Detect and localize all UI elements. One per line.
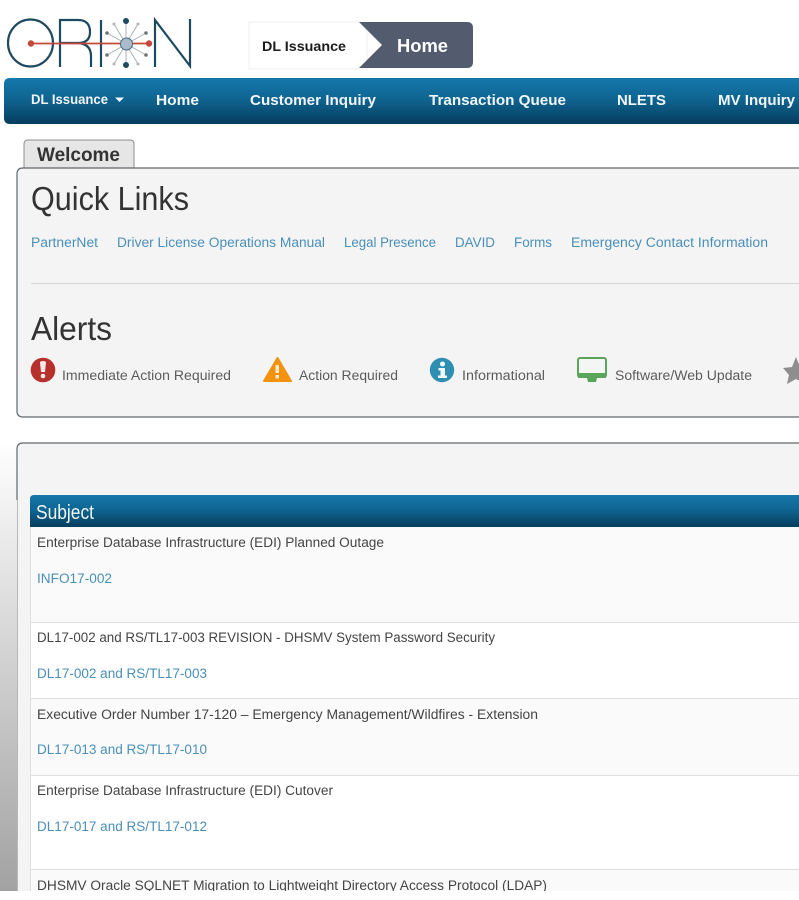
row 3: DL17-013 and RS/TL17-010 — [37, 742, 207, 757]
breadcrumb — [249, 22, 473, 69]
row 4: DL17-017 and RS/TL17-012 — [37, 819, 207, 834]
quick link list: PartnerNet — [31, 235, 98, 250]
icon: action required — [264, 358, 291, 381]
tab: Welcome — [24, 140, 134, 168]
navigation bar: Customer Inquiry — [250, 92, 377, 109]
row 4 — [37, 783, 334, 834]
table header: Subject — [30, 495, 799, 527]
navigation bar: DL Issuance — [31, 91, 108, 107]
tab: Welcome: Welcome — [37, 145, 120, 166]
row 2: DL17-002 and RS/TL17-003 — [37, 666, 207, 681]
row 3 — [37, 707, 538, 757]
panel: quick links and alerts — [17, 168, 799, 417]
table rows background — [30, 527, 799, 891]
quick link list: DAVID — [455, 235, 495, 250]
row 1: Enterprise Database Infrastructure (EDI) Planned Outage — [37, 535, 384, 550]
icon: immediate action — [31, 358, 55, 382]
icon: software update — [578, 358, 606, 382]
alert legend: Action Required — [299, 368, 398, 383]
row 1 — [37, 535, 384, 586]
table header: Subject: Subject — [36, 502, 94, 524]
row 5: DHSMV Oracle SQLNET Migration to Lightweight Directory Access Protocol (LDAP) — [37, 878, 547, 893]
alert legend: Immediate Action Required — [62, 368, 231, 383]
quick link list — [31, 235, 768, 250]
left page gradient strip — [0, 440, 18, 891]
row 2 — [37, 630, 495, 681]
navigation bar: Transaction Queue — [429, 92, 566, 109]
quick link list: Legal Presence — [344, 235, 436, 250]
navigation bar — [4, 78, 799, 124]
row 1: INFO17-002 — [37, 571, 112, 586]
alert legend: Software/Web Update — [615, 368, 752, 383]
heading: Quick Links: Quick Links — [31, 180, 189, 217]
quick link list: Emergency Contact Information — [571, 235, 768, 250]
alert legend: Informational — [462, 368, 545, 383]
navigation bar: NLETS — [617, 92, 666, 109]
icon: informational — [430, 358, 454, 382]
panel: subject list — [17, 443, 799, 893]
navigation bar: MV Inquiry — [718, 92, 796, 109]
heading: Alerts: Alerts — [31, 310, 112, 347]
alert legend — [31, 357, 799, 384]
row 4: Enterprise Database Infrastructure (EDI) Cutover — [37, 783, 334, 798]
quick link list: Forms — [514, 235, 552, 250]
quick link list: Driver License Operations Manual — [117, 235, 325, 250]
breadcrumb: Home — [397, 36, 448, 56]
breadcrumb: DL Issuance — [262, 38, 346, 54]
row 2: DL17-002 and RS/TL17-003 REVISION - DHSMV System Password Security — [37, 630, 495, 645]
navigation bar: Home — [156, 92, 199, 109]
row 3: Executive Order Number 17-120 – Emergency Management/Wildfires - Extension — [37, 707, 538, 722]
logo: ORION — [8, 18, 190, 68]
icon: star — [783, 357, 799, 384]
